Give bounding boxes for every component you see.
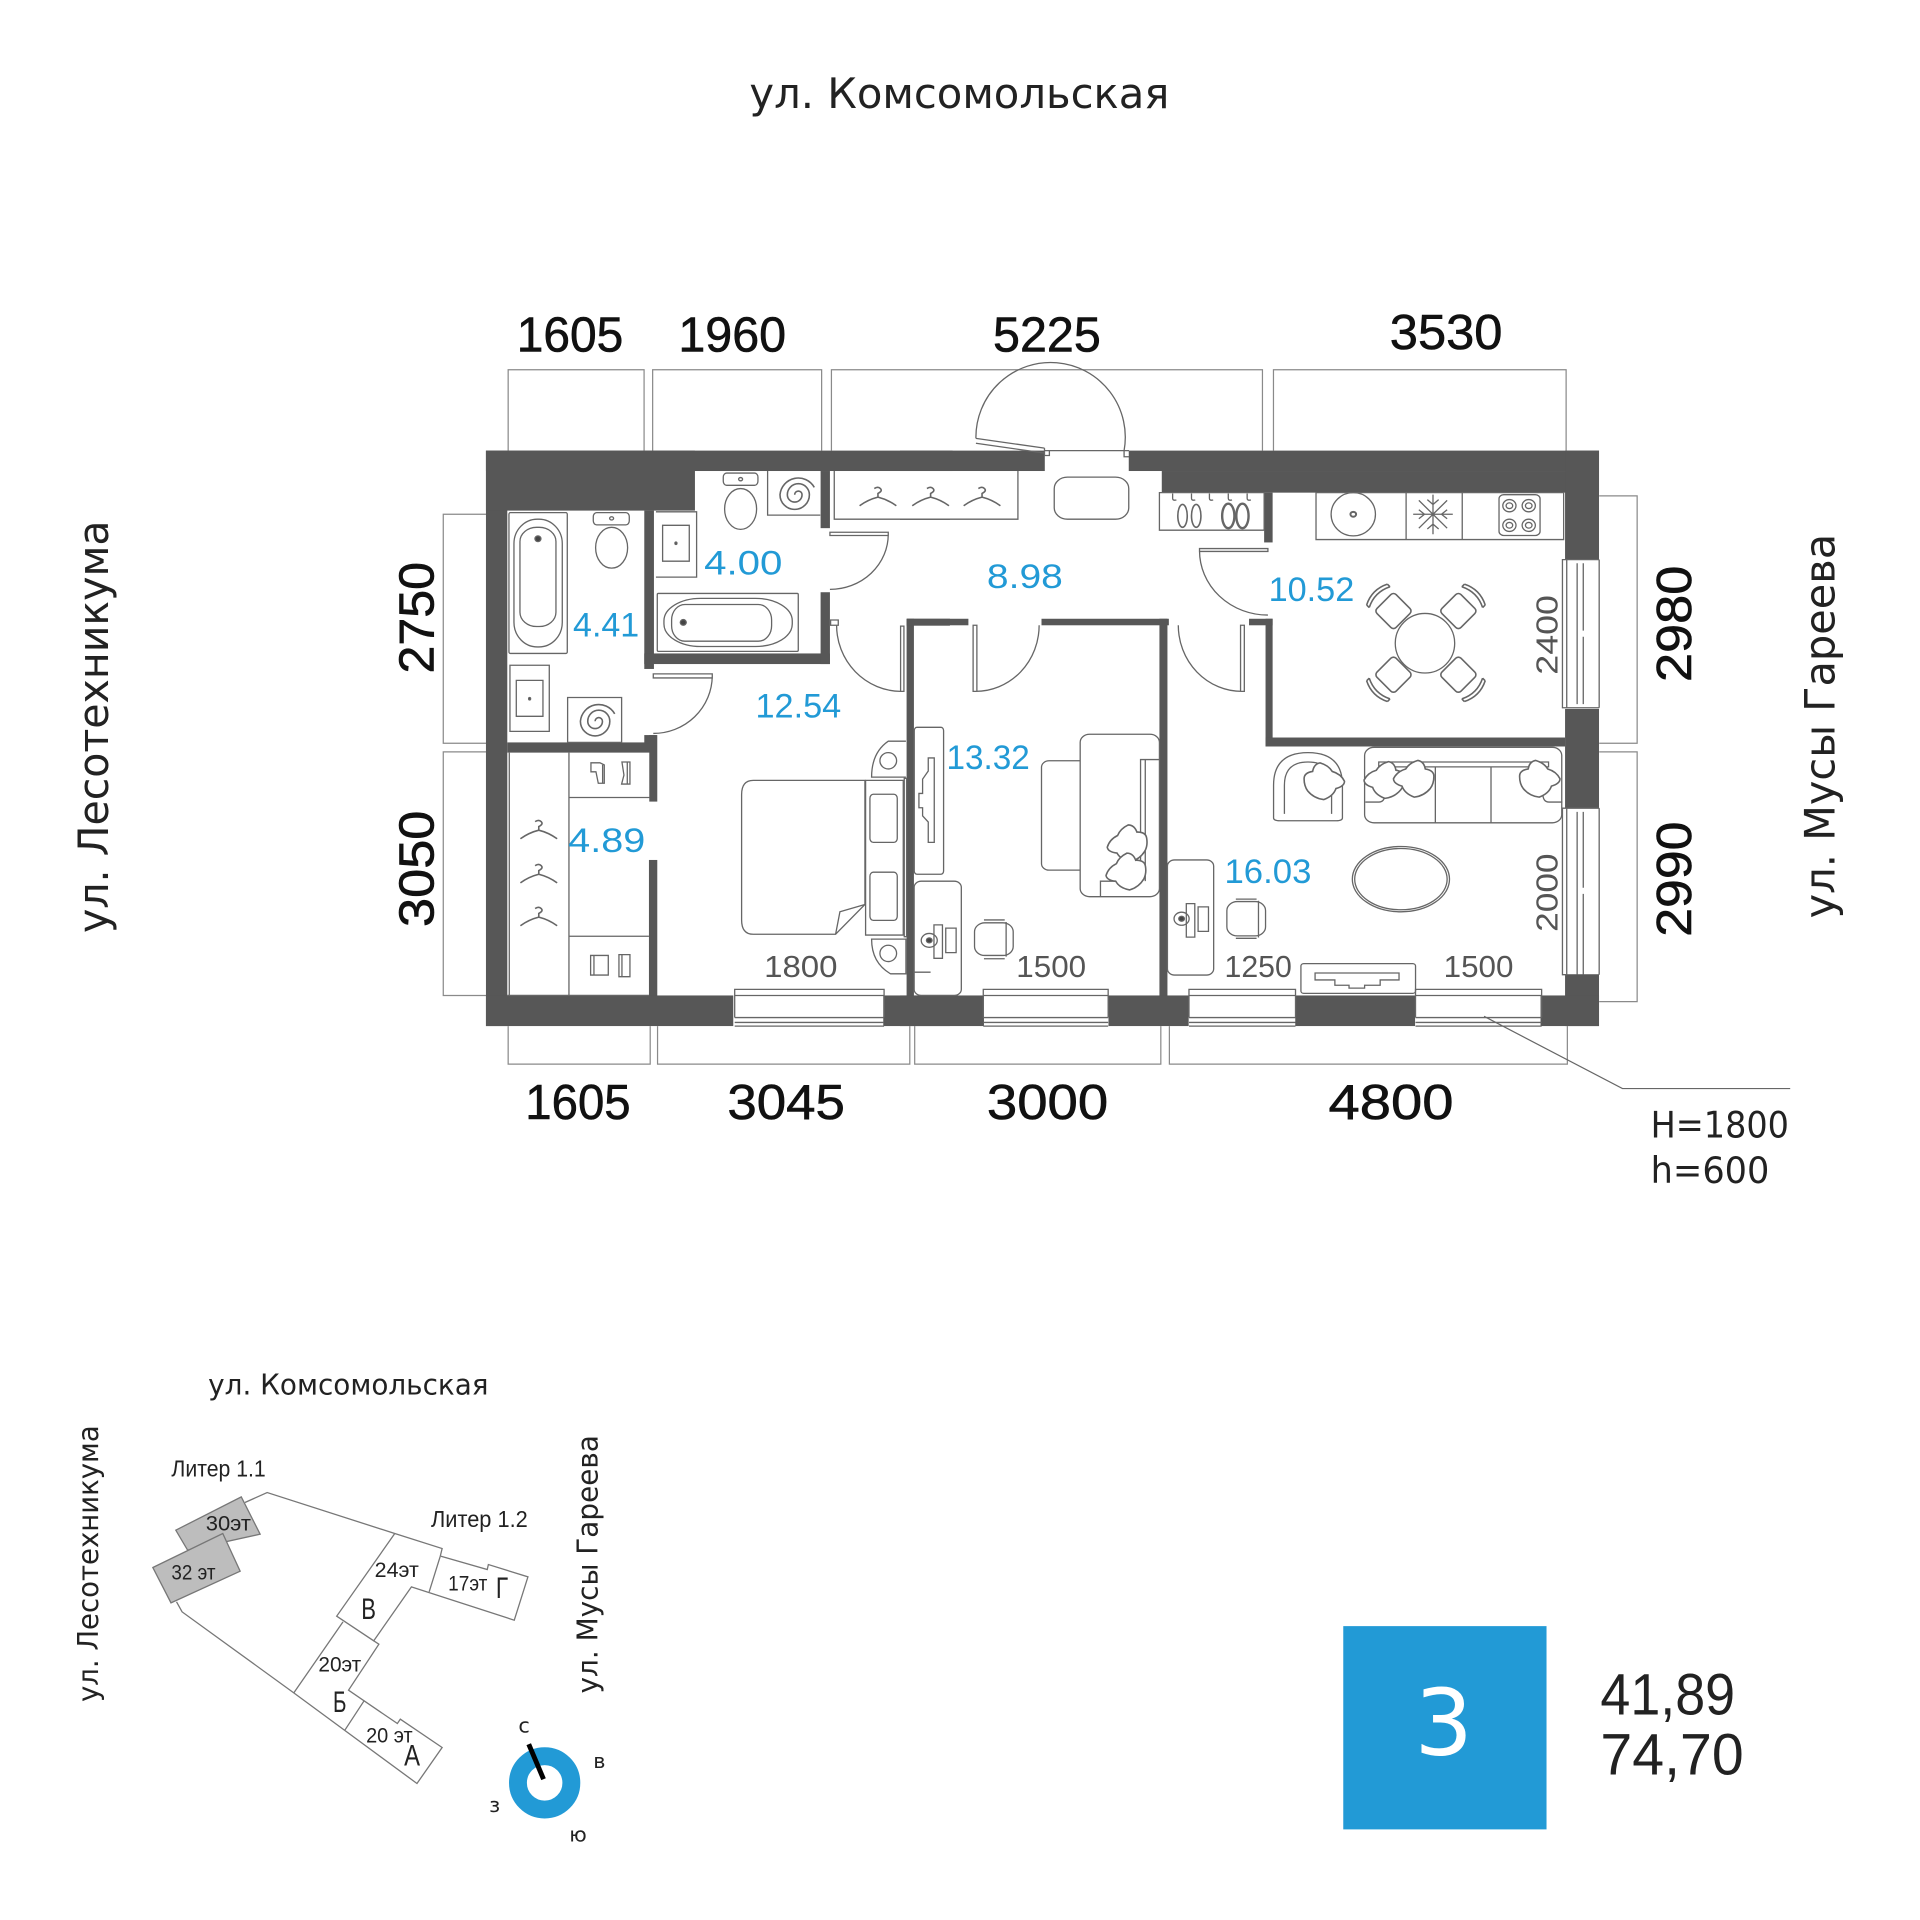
dimensions: right: 2980 [1648, 566, 1702, 682]
window height note: H=1800 [1651, 1104, 1789, 1147]
wardrobe [507, 753, 650, 995]
hall wardrobe left section [834, 471, 950, 519]
sink 2 [656, 512, 697, 577]
block: 32 floors [153, 1534, 240, 1603]
areas: living and total: 74,70 [1600, 1722, 1744, 1787]
dimension boxes [443, 370, 1637, 1064]
toilet 1 [593, 513, 629, 568]
room areas: 16.03 [1224, 853, 1311, 891]
opening sizes: 2400 [1531, 595, 1565, 675]
site plan labels: 20эт [318, 1653, 362, 1676]
window height leader [1484, 1016, 1790, 1089]
block: 30 floors [176, 1497, 260, 1550]
desk: living room [1167, 860, 1214, 975]
dimensions: right [1648, 566, 1702, 937]
door: kitchen [1200, 549, 1268, 615]
kitchen counter [1316, 493, 1564, 540]
street label: left: ул. Лесотехникума [69, 520, 118, 933]
pillows and accessories [520, 478, 1562, 926]
boiler 1 box [568, 698, 622, 742]
furniture: right part [900, 471, 1564, 995]
dimensions: bottom [525, 1076, 1453, 1130]
opening sizes: 1500 [1016, 950, 1086, 984]
chair: room 2 [975, 920, 1013, 959]
dimensions: bottom: 3000 [987, 1076, 1108, 1130]
compass: с [518, 1714, 530, 1738]
compass: в [593, 1749, 606, 1773]
title: street name: ул. Комсомольская [749, 69, 1169, 118]
shoes [591, 762, 630, 977]
site plan labels: 30эт [206, 1513, 252, 1536]
window height note: h=600 [1651, 1149, 1769, 1192]
site plan labels: Литер 1.2 [431, 1506, 528, 1532]
walls: left part [486, 451, 953, 1026]
door: bedroom [831, 620, 904, 691]
furniture: left part [507, 471, 950, 995]
dimensions: top: 3530 [1390, 306, 1502, 360]
room areas [568, 544, 1354, 891]
street label: right: ул. Мусы Гареева [1795, 534, 1844, 918]
site plan labels: Литер 1.1 [171, 1456, 266, 1482]
snowflake icon [1413, 495, 1453, 534]
site plan street: left: ул. Лесотехникума [72, 1425, 105, 1702]
windows: bottom [735, 989, 1542, 1026]
site plan street: top: ул. Комсомольская [208, 1369, 489, 1402]
compass: з [489, 1793, 500, 1817]
dimensions: bottom: 3045 [727, 1076, 845, 1130]
opening sizes: 1500 [1444, 950, 1513, 984]
shoe rack [1159, 493, 1264, 530]
entrance door [976, 362, 1129, 457]
site plan [153, 1493, 528, 1784]
boiler 2 box [768, 471, 820, 515]
room areas: 13.32 [947, 739, 1030, 777]
walls: right part [900, 451, 1599, 1026]
door: living room [1178, 625, 1244, 691]
room count badge [1343, 1626, 1547, 1829]
compass: ю [569, 1823, 587, 1847]
opening sizes [764, 595, 1565, 984]
armchair [1274, 753, 1342, 821]
site outline [177, 1493, 528, 1784]
bed [742, 778, 907, 937]
hall wardrobe right section [900, 471, 1018, 519]
stove [1499, 495, 1540, 535]
site plan labels [171, 1456, 528, 1773]
dimensions: left [390, 562, 444, 927]
room areas: 8.98 [987, 558, 1063, 596]
dimensions: right: 2990 [1648, 822, 1702, 937]
site plan labels: Б [333, 1686, 347, 1719]
site plan labels: 17эт [448, 1573, 488, 1596]
chair: living room [1227, 899, 1266, 938]
dimensions: bottom: 1605 [525, 1076, 631, 1130]
dimensions: top [517, 306, 1502, 362]
sofa: room 2 [1042, 734, 1159, 897]
desk: room 2 [914, 881, 961, 995]
dimensions: top: 1960 [678, 308, 786, 362]
opening sizes: 1800 [764, 950, 838, 984]
opening sizes: 1250 [1224, 950, 1292, 984]
site plan labels: 24эт [375, 1559, 419, 1582]
dimensions: top: 5225 [993, 308, 1101, 362]
dimensions: left: 2750 [390, 562, 444, 673]
room areas: 4.41 [573, 607, 639, 645]
door: room 2 [973, 625, 1039, 691]
window height note [1651, 1104, 1789, 1192]
door: bathroom 1 [653, 674, 712, 733]
room areas: 4.00 [704, 544, 782, 582]
site plan labels: 32 эт [171, 1562, 216, 1585]
nightstands [872, 741, 931, 974]
sofa: living room [1365, 747, 1562, 823]
door: bathroom 2 [830, 532, 888, 589]
dimensions: bottom: 4800 [1329, 1076, 1453, 1130]
areas: living and total: 41,89 [1600, 1662, 1735, 1727]
sink 1 [510, 665, 549, 731]
bathtub 2 [657, 593, 798, 651]
site plan labels: 20 эт [366, 1724, 413, 1747]
room count badge: 3 [1414, 1670, 1473, 1777]
pouf [1054, 477, 1129, 519]
bathtub 1 [509, 513, 567, 653]
dimensions: top: 1605 [517, 308, 623, 362]
room areas: 4.89 [568, 822, 645, 860]
rug [1352, 846, 1449, 912]
dining table [1395, 613, 1455, 673]
site plan street: right: ул. Мусы Гареева [572, 1435, 605, 1693]
toilet 2 [723, 473, 758, 529]
room areas: 10.52 [1269, 571, 1354, 609]
opening sizes: 2000 [1531, 853, 1565, 932]
site plan labels: Г [496, 1572, 508, 1605]
windows: right [1562, 560, 1599, 975]
site plan labels: В [361, 1593, 376, 1626]
TV: living room [1301, 964, 1416, 993]
dimensions: left: 3050 [390, 811, 444, 927]
areas: living and total [1600, 1662, 1744, 1787]
room areas: 12.54 [756, 688, 841, 726]
TV stand: bedroom side [914, 727, 944, 874]
site plan labels: А [404, 1740, 420, 1773]
compass [489, 1714, 606, 1847]
